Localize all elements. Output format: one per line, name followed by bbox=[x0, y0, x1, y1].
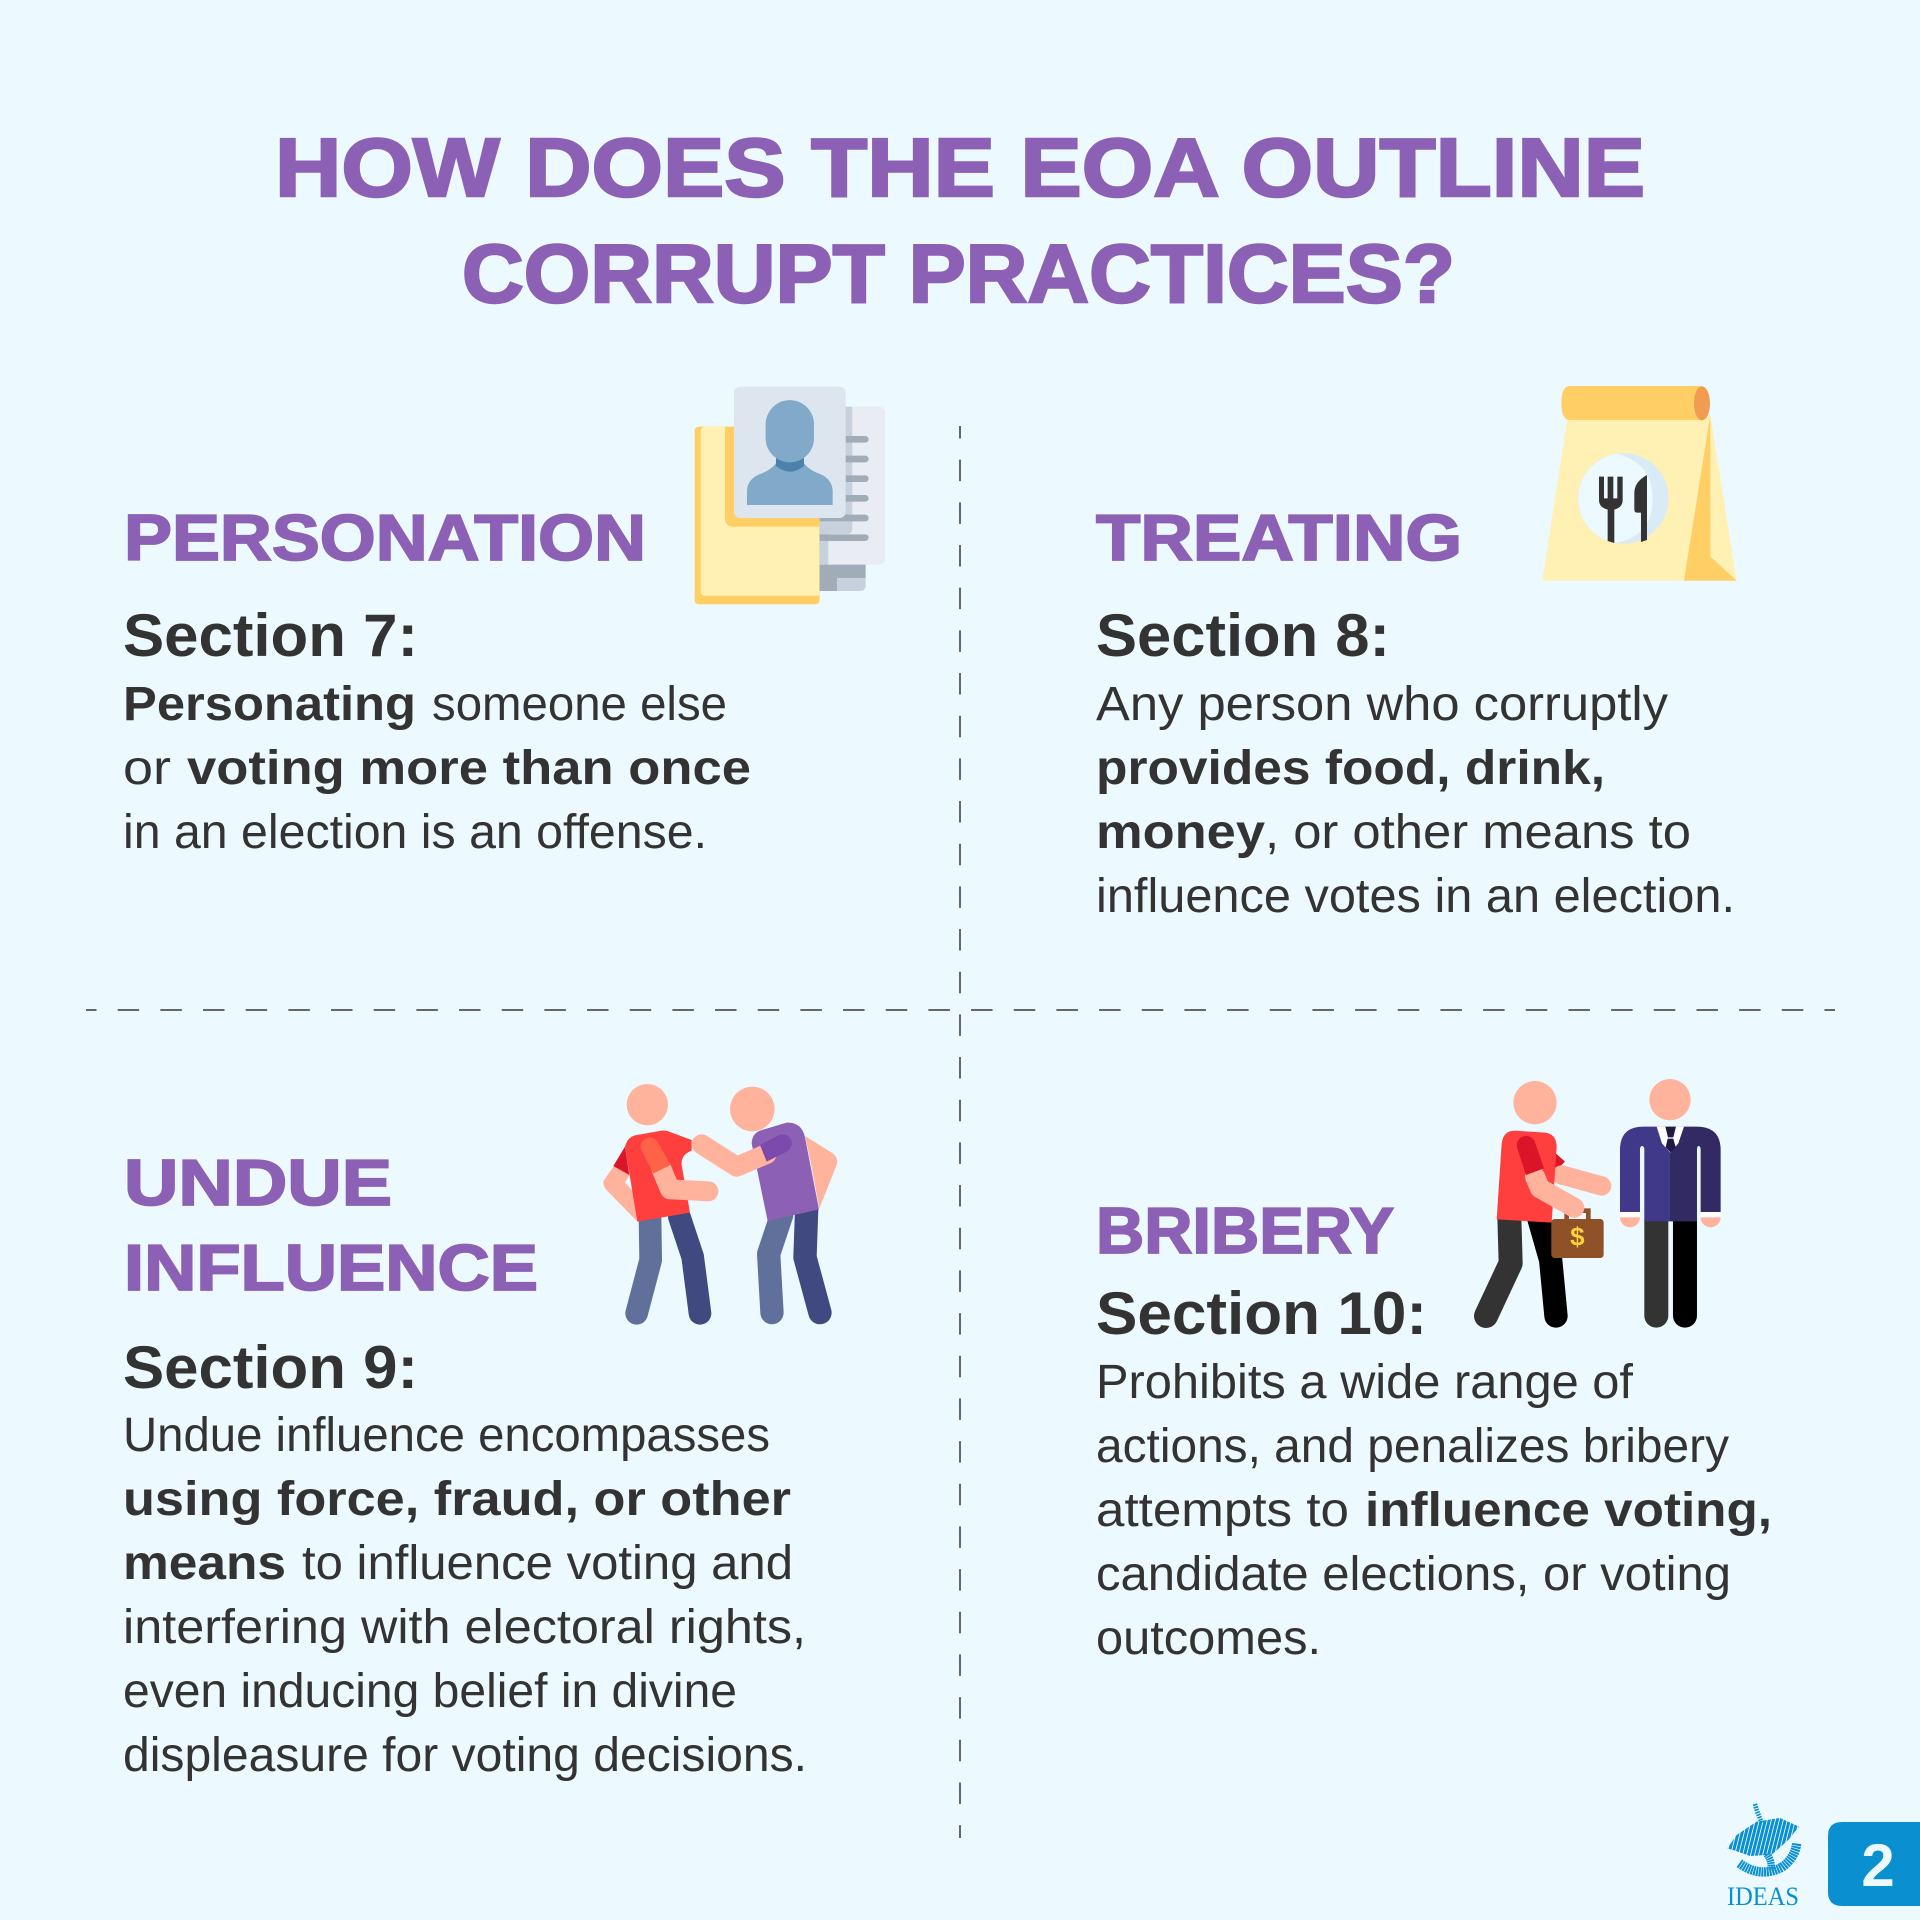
body text: section 8: money bbox=[1096, 806, 1265, 859]
body text: section 9: Undue influence encompasses bbox=[123, 1409, 770, 1462]
body text: section 7: someone else bbox=[432, 678, 727, 731]
heading: treating: TREATING bbox=[1096, 501, 1462, 574]
logo wordmark: IDEAS bbox=[1727, 1882, 1799, 1911]
body text: section 10: actions, and penalizes bribery bbox=[1096, 1420, 1729, 1473]
section label: section 8: Section 8: bbox=[1096, 602, 1390, 669]
logo: IDEAS bbox=[1727, 1803, 1802, 1906]
body text: section 7: Personating bbox=[123, 678, 416, 731]
icon: two people scuffling bbox=[603, 1084, 837, 1313]
body text: section 9: means bbox=[123, 1537, 286, 1590]
body text: section 10: influence voting, bbox=[1365, 1484, 1772, 1537]
body text: section 9: even inducing belief in divine bbox=[123, 1665, 737, 1718]
body text: section 10: candidate elections, or voting bbox=[1096, 1548, 1731, 1601]
section label: section 10: Section 10: bbox=[1096, 1280, 1427, 1347]
body text: section 9: displeasure for voting decisions. bbox=[123, 1729, 807, 1782]
body text: section 8: , or other means to bbox=[1265, 806, 1691, 859]
heading: undue influence: INFLUENCE bbox=[124, 1231, 538, 1304]
heading: bribery: BRIBERY bbox=[1096, 1194, 1394, 1267]
body text: section 7: in an election is an offense. bbox=[123, 806, 707, 859]
section label: section 7: Section 7: bbox=[123, 602, 418, 669]
body text: section 9: to influence voting and bbox=[302, 1537, 793, 1590]
icon: documents and id card bbox=[695, 387, 885, 604]
body text: section 10 bbox=[1096, 1356, 1772, 1665]
page number badge bbox=[1828, 1822, 1920, 1906]
body text: section 7: or bbox=[123, 742, 171, 795]
page number badge: 2 bbox=[1861, 1832, 1895, 1899]
body text: section 8: Any person who corruptly bbox=[1096, 678, 1668, 731]
panel: undue influence bbox=[123, 1084, 837, 1782]
body text: section 8 bbox=[1096, 678, 1735, 923]
body text: section 7 bbox=[123, 678, 751, 859]
title bbox=[275, 121, 1645, 320]
body text: section 10: attempts to bbox=[1096, 1484, 1349, 1537]
title: CORRUPT PRACTICES? bbox=[462, 227, 1455, 320]
body text: section 7: voting more than once bbox=[187, 742, 751, 795]
body text: section 9: interfering with electoral rights, bbox=[123, 1601, 806, 1654]
icon: food bag bbox=[1542, 386, 1737, 581]
panel: bribery bbox=[1096, 1079, 1772, 1665]
heading: personation: PERSONATION bbox=[124, 501, 646, 574]
body text: section 8: provides food, drink, bbox=[1096, 742, 1605, 795]
body text: section 8: influence votes in an election. bbox=[1096, 870, 1735, 923]
icon: bribe with briefcase bbox=[1486, 1079, 1721, 1316]
title: HOW DOES THE EOA OUTLINE bbox=[275, 121, 1645, 214]
section label: section 9: Section 9: bbox=[123, 1334, 418, 1401]
panel: personation bbox=[123, 387, 885, 859]
body text: section 10: Prohibits a wide range of bbox=[1096, 1356, 1634, 1409]
body text: section 10: outcomes. bbox=[1096, 1612, 1321, 1665]
icon: bribe with briefcase: $ bbox=[1570, 1222, 1585, 1252]
heading: undue influence: UNDUE bbox=[124, 1146, 392, 1219]
heading: undue influence bbox=[124, 1146, 538, 1304]
body text: section 9 bbox=[123, 1409, 807, 1782]
panel: treating bbox=[1096, 386, 1737, 923]
body text: section 9: using force, fraud, or other bbox=[123, 1473, 791, 1526]
logo mark: bird bbox=[1723, 1804, 1803, 1872]
